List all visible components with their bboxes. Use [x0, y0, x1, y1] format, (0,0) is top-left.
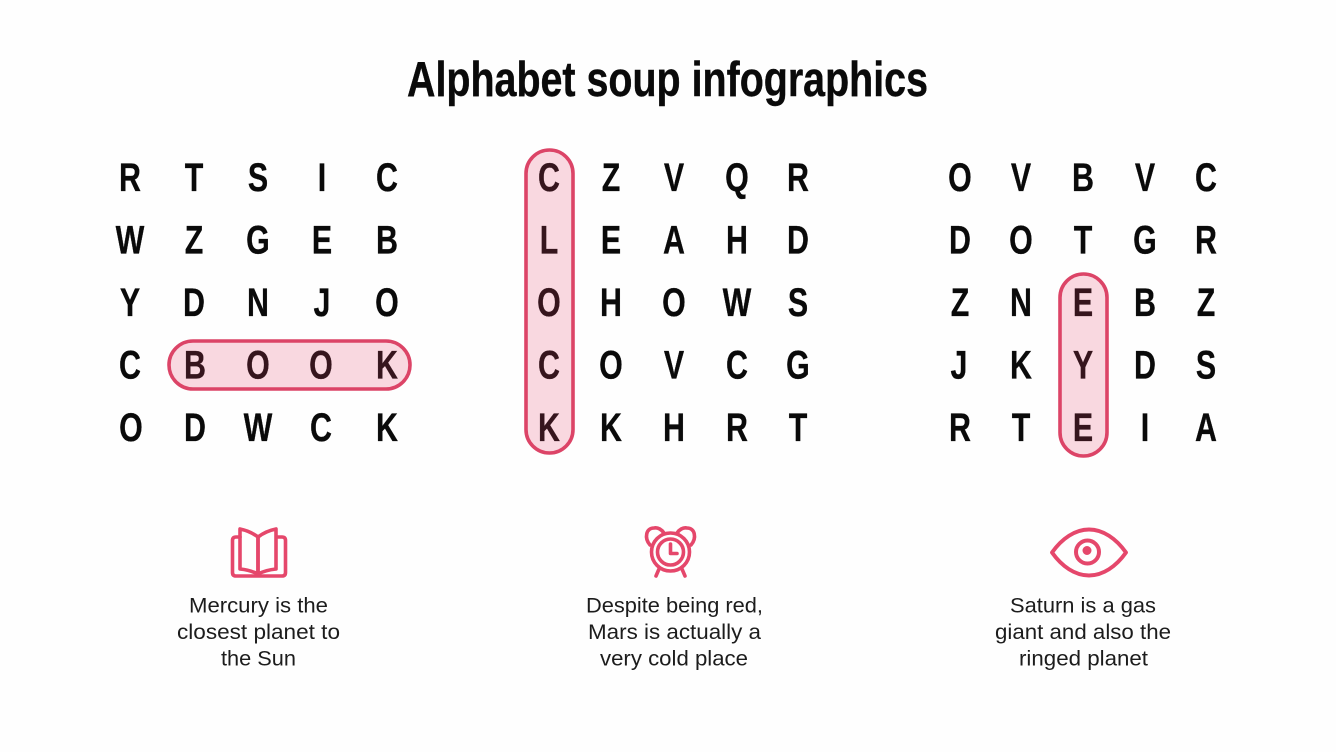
- text block: Mars: Despite being red,: [586, 594, 763, 618]
- panel: word grid CLOCK: Q: [725, 155, 749, 200]
- panel: word grid EYE: [948, 155, 1217, 456]
- panel: word grid EYE: O: [948, 155, 972, 200]
- panel: word grid EYE: C: [1195, 155, 1217, 200]
- panel: word grid EYE: O: [1009, 217, 1033, 263]
- panel: word grid EYE: E: [1073, 405, 1093, 450]
- panel: word grid CLOCK: H: [726, 217, 748, 263]
- panel: word grid CLOCK: D: [787, 217, 809, 263]
- panel: word grid BOOK: T: [185, 155, 204, 200]
- panel: word grid EYE: I: [1141, 405, 1149, 450]
- panel: word grid BOOK: K: [376, 405, 398, 450]
- panel: word grid BOOK: O: [119, 405, 143, 450]
- panel: word grid EYE: N: [1010, 280, 1032, 325]
- panel: word grid CLOCK: H: [663, 405, 685, 450]
- text block: Mercury: [177, 594, 340, 670]
- panel: word grid BOOK: Y: [120, 280, 140, 325]
- panel: word grid CLOCK: T: [789, 405, 808, 450]
- panel: word grid BOOK: K: [376, 342, 398, 388]
- panel: word grid BOOK: N: [247, 280, 269, 325]
- icon: alarm clock: [647, 528, 694, 576]
- panel: word grid CLOCK: R: [726, 405, 748, 450]
- panel: word grid BOOK: D: [183, 280, 205, 325]
- panel: word grid EYE: T: [1074, 217, 1093, 263]
- panel: word grid EYE: D: [1134, 342, 1156, 388]
- icon: eye: [1052, 530, 1126, 576]
- panel: word grid EYE: S: [1196, 342, 1216, 388]
- text block: Mercury: closest planet to: [177, 621, 340, 644]
- highlight: CLOCK: [526, 150, 573, 453]
- panel: word grid CLOCK: C: [726, 342, 748, 388]
- panel: word grid BOOK: I: [318, 155, 326, 200]
- panel: word grid BOOK: C: [119, 342, 141, 388]
- text block: Mars: [586, 594, 763, 670]
- panel: word grid CLOCK: H: [600, 280, 622, 325]
- text block: Saturn: Saturn is a gas: [1010, 594, 1156, 618]
- panel: word grid EYE: J: [951, 342, 967, 388]
- panel: word grid CLOCK: O: [599, 342, 623, 388]
- panel: word grid BOOK: W: [244, 405, 273, 450]
- panel: word grid EYE: V: [1011, 155, 1031, 200]
- panel: word grid BOOK: W: [116, 217, 145, 263]
- panel: word grid BOOK: S: [248, 155, 268, 200]
- panel: word grid CLOCK: O: [537, 280, 561, 325]
- text block: Saturn: [995, 594, 1171, 670]
- text block: Mars: very cold place: [600, 648, 748, 670]
- panel: word grid CLOCK: A: [663, 217, 685, 263]
- panel: word grid CLOCK: Z: [602, 155, 620, 200]
- highlight: BOOK: [169, 341, 410, 389]
- panel: word grid BOOK: C: [376, 155, 398, 200]
- icon: open book: [232, 529, 286, 576]
- panel: word grid BOOK: G: [246, 217, 270, 263]
- panel: word grid CLOCK: R: [787, 155, 809, 200]
- panel: word grid CLOCK: C: [538, 342, 560, 388]
- panel: word grid CLOCK: K: [600, 405, 622, 450]
- panel: word grid CLOCK: V: [664, 342, 684, 388]
- text block: Mercury: the Sun: [221, 648, 296, 670]
- text block: Saturn: giant and also the: [995, 621, 1171, 644]
- panel: word grid BOOK: R: [119, 155, 141, 200]
- panel: word grid CLOCK: W: [723, 280, 752, 325]
- text block: Mars: Mars is actually a: [588, 621, 761, 644]
- panel: word grid EYE: Z: [951, 280, 969, 325]
- panel: word grid EYE: R: [949, 405, 971, 450]
- panel: word grid BOOK: D: [184, 405, 206, 450]
- panel: word grid EYE: B: [1134, 280, 1156, 325]
- panel: word grid EYE: D: [949, 217, 971, 263]
- panel: word grid BOOK: C: [310, 405, 332, 450]
- panel: word grid EYE: R: [1195, 217, 1217, 263]
- panel: word grid CLOCK: L: [540, 217, 558, 263]
- panel: word grid CLOCK: E: [601, 217, 621, 263]
- panel: word grid BOOK: B: [184, 342, 206, 388]
- panel: word grid CLOCK: G: [786, 342, 810, 388]
- title: Alphabet soup infographics: [407, 53, 928, 107]
- panel: word grid CLOCK: [526, 150, 810, 453]
- panel: word grid EYE: T: [1012, 405, 1031, 450]
- panel: word grid BOOK: B: [376, 217, 398, 263]
- panel: word grid EYE: Y: [1073, 342, 1093, 388]
- panel: word grid BOOK: J: [314, 280, 330, 325]
- panel: word grid BOOK: E: [312, 217, 332, 263]
- panel: word grid EYE: Z: [1197, 280, 1215, 325]
- text block: Mercury: Mercury is the: [189, 594, 328, 618]
- panel: word grid EYE: A: [1195, 405, 1217, 450]
- panel: word grid BOOK: O: [375, 280, 399, 325]
- panel: word grid EYE: B: [1072, 155, 1094, 200]
- panel: word grid BOOK: O: [309, 342, 333, 388]
- text block: Saturn: ringed planet: [1019, 648, 1148, 670]
- panel: word grid EYE: G: [1133, 217, 1157, 263]
- panel: word grid BOOK: O: [246, 342, 270, 388]
- panel: word grid CLOCK: S: [788, 280, 808, 325]
- panel: word grid CLOCK: C: [538, 155, 560, 200]
- panel: word grid CLOCK: V: [664, 155, 684, 200]
- panel: word grid CLOCK: O: [662, 280, 686, 325]
- highlight: EYE: [1060, 274, 1107, 456]
- panel: word grid EYE: V: [1135, 155, 1155, 200]
- panel: word grid EYE: E: [1073, 280, 1093, 325]
- panel: word grid CLOCK: K: [538, 405, 560, 450]
- panel: word grid BOOK: [116, 155, 410, 450]
- panel: word grid EYE: K: [1010, 342, 1032, 388]
- panel: word grid BOOK: Z: [185, 217, 203, 263]
